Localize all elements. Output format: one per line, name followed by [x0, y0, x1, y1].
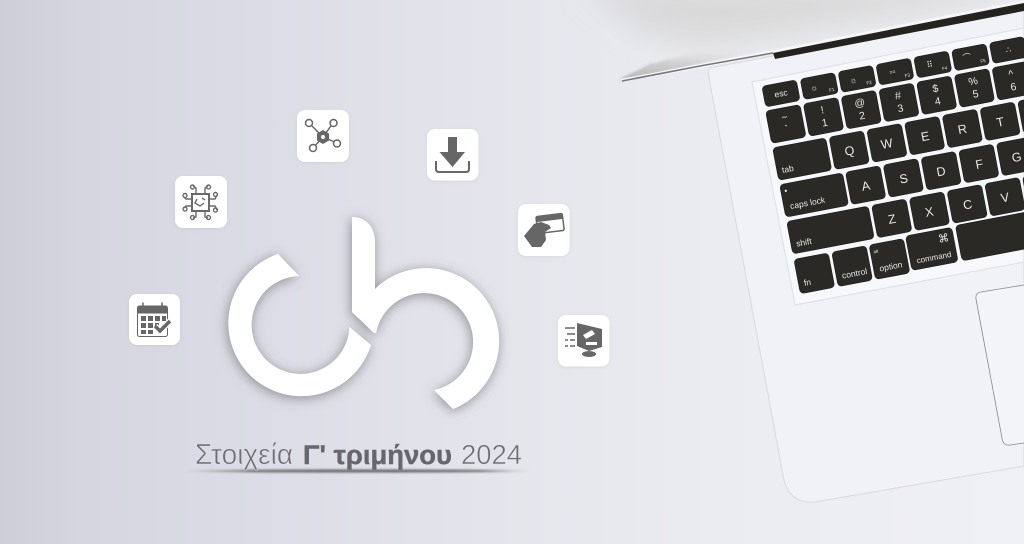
- function key row: F1: [829, 87, 835, 93]
- function key row: ∴: [1005, 44, 1012, 55]
- QWERTY key row: [773, 95, 1024, 180]
- QWERTY key row: E: [920, 129, 931, 144]
- number key row: 2: [858, 110, 866, 123]
- ZXCV key row: Z: [887, 212, 897, 227]
- function key row: F5: [980, 58, 987, 64]
- function key row: esc: [774, 87, 789, 100]
- ASDF key row: S: [898, 171, 909, 187]
- title: Γ' τριμήνου: [303, 440, 452, 470]
- letter c: [228, 254, 371, 396]
- black hinge strip: [773, 3, 1024, 59]
- caption shadow line: [182, 470, 532, 472]
- ZXCV key row: [787, 170, 1024, 254]
- keyboard well: [752, 28, 1024, 305]
- icon: calendar: [129, 294, 180, 345]
- number key row: ~: [780, 111, 789, 124]
- laptop: [580, 0, 1024, 502]
- QWERTY key row: T: [995, 115, 1006, 130]
- ASDF key row: D: [935, 164, 947, 180]
- function key row: F3: [904, 72, 911, 78]
- laptop base: [709, 8, 1024, 502]
- number key row: [766, 54, 1024, 144]
- ASDF key row: A: [860, 178, 872, 194]
- bottom key row: option: [879, 259, 903, 273]
- number key row: 3: [897, 102, 905, 115]
- ASDF key row: G: [1011, 150, 1023, 165]
- number key row: 6: [1009, 81, 1018, 94]
- ZXCV key row: V: [1000, 190, 1011, 205]
- function key row: ▫▫: [889, 66, 896, 77]
- lid edge: [620, 0, 1024, 82]
- bottom key row: command: [916, 250, 952, 265]
- title: [195, 439, 522, 471]
- number key row: #: [894, 90, 902, 102]
- keyboard keys: [761, 18, 1024, 294]
- number key row: !: [820, 104, 825, 117]
- bottom key row: alt: [873, 248, 879, 254]
- lid wedge: [620, 50, 760, 81]
- bottom key row: [793, 188, 1024, 294]
- ASDF key row: •: [783, 186, 788, 196]
- number key row: ^: [1007, 68, 1015, 81]
- letter h: [352, 217, 499, 409]
- number key row: $: [931, 82, 940, 95]
- trackpad: [976, 285, 1024, 445]
- ZXCV key row: X: [924, 204, 935, 220]
- function key row: ☼: [849, 74, 858, 86]
- QWERTY key row: tab: [781, 163, 795, 175]
- number key row: @: [853, 96, 866, 110]
- ASDF key row: [780, 130, 1024, 217]
- number key row: %: [967, 75, 979, 88]
- bottom key row: fn: [803, 277, 812, 288]
- title: Στοιχεία: [195, 439, 293, 471]
- icon: network nodes: [297, 110, 349, 162]
- ZXCV key row: shift: [795, 236, 813, 249]
- function key row: ⌒: [962, 52, 973, 63]
- number key row: 4: [934, 95, 942, 108]
- number key row: `: [784, 123, 790, 136]
- number key row: 5: [972, 88, 980, 101]
- icon: circuit chip: [175, 176, 227, 228]
- function key row: [762, 36, 1024, 107]
- function key row: ☼: [809, 82, 819, 93]
- function key row: F4: [942, 65, 948, 71]
- QWERTY key row: Q: [843, 143, 856, 159]
- icon: download: [427, 129, 478, 180]
- bottom key row: ⌘: [937, 232, 950, 246]
- logo: ch monogram: [228, 217, 499, 409]
- ASDF key row: F: [974, 157, 985, 172]
- title: 2024: [461, 439, 522, 470]
- function key row: F2: [866, 80, 873, 86]
- QWERTY key row: R: [957, 122, 968, 137]
- icon: hand holding card: [518, 204, 570, 256]
- function key row: ⠿: [926, 59, 934, 70]
- ASDF key row: caps lock: [789, 194, 827, 211]
- ZXCV key row: C: [962, 197, 973, 213]
- bottom key row: control: [841, 266, 868, 281]
- lid shadow: [580, 0, 1024, 46]
- number key row: 1: [821, 117, 829, 130]
- QWERTY key row: W: [880, 136, 894, 152]
- icon: monitor with gavel: [558, 315, 610, 366]
